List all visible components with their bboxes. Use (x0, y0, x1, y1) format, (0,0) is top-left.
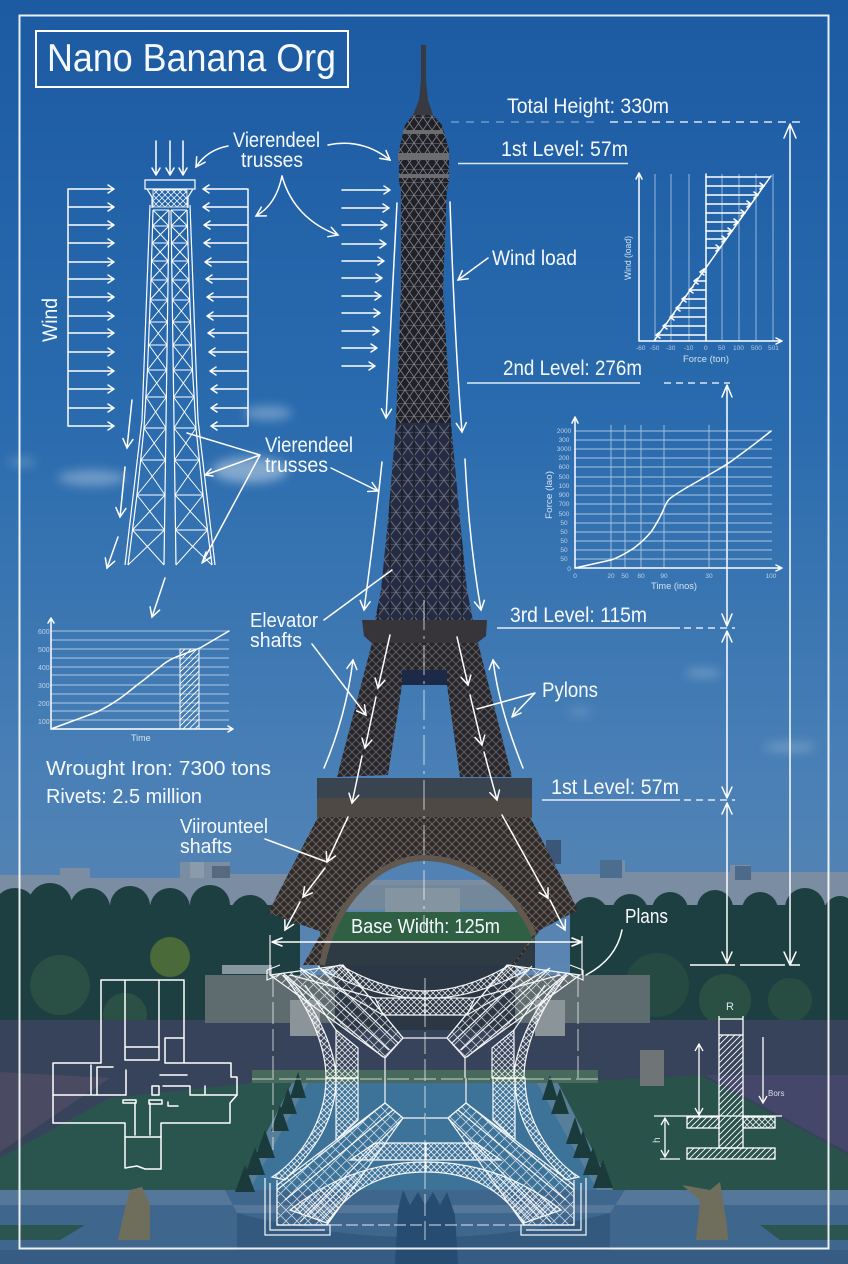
force chart grid (575, 425, 772, 568)
chart hatch (180, 649, 199, 729)
label: Vierendeel trusses mid: trusses (265, 454, 328, 477)
force chart y labels (557, 428, 777, 580)
statue left (118, 1187, 150, 1240)
force chart y labels: 100 (766, 573, 777, 580)
force chart y labels: 30 (705, 573, 713, 580)
top deck bands (398, 130, 449, 178)
force chart y label: Force (lao) (544, 471, 554, 519)
stats text: Wrought Iron: 7300 tons (46, 758, 271, 780)
city skyline (0, 840, 848, 905)
force chart y labels: 100 (559, 483, 570, 490)
label: Elevator shafts: Elevator (250, 610, 318, 632)
chart labels: 500 (38, 647, 50, 654)
chart grid (51, 631, 229, 720)
floor plan outline (53, 980, 237, 1169)
force chart y labels: 50 (621, 573, 629, 580)
wind chart tick labels: 0 (704, 345, 708, 352)
wind chart diagonal (654, 176, 771, 341)
chart curve (51, 631, 229, 729)
second platform (362, 620, 487, 646)
wind chart axes (636, 173, 782, 344)
wind arrows right of truss (203, 185, 248, 430)
title: Nano Banana Org (47, 37, 336, 80)
force chart y labels: 20 (607, 573, 615, 580)
arch band (322, 858, 534, 965)
wind chart small arrows (656, 183, 764, 338)
force chart y labels: 200 (559, 455, 570, 462)
force chart y labels: 50 (560, 520, 568, 527)
wind chart y label: Wind (load) (623, 236, 633, 280)
force chart y labels: 0 (573, 573, 577, 580)
wind chart tick labels: -50 (650, 345, 660, 352)
force chart y labels: 50 (560, 529, 568, 536)
chart labels: 400 (38, 665, 50, 672)
force chart y labels: 500 (559, 511, 570, 518)
tower top drum (399, 115, 449, 190)
wind arrows left (68, 185, 114, 430)
chart axes (48, 618, 233, 732)
label: wind: Wind (39, 298, 62, 342)
cross beam (402, 670, 447, 685)
lower arch structure (268, 817, 578, 965)
force chart y labels: 0 (567, 566, 571, 573)
dimension: total height: Total Height: 330m (507, 95, 669, 118)
force chart y labels: 500 (559, 474, 570, 481)
downward arrows left of truss (107, 400, 165, 617)
force chart y labels: 900 (559, 492, 570, 499)
wind load chart (623, 173, 782, 365)
chart labels: 100 (38, 719, 50, 726)
force chart y labels: 3000 (557, 446, 572, 453)
wind chart tick labels (636, 345, 779, 352)
tower spire (413, 45, 433, 115)
section flanges (687, 1117, 719, 1128)
label: Elevator shafts (250, 610, 318, 652)
label: Vierendeel trusses top: Vierendeel (233, 129, 320, 152)
wind chart tick labels: 50 (718, 345, 726, 352)
force chart y labels: 50 (560, 547, 568, 554)
middle shaft (375, 423, 473, 620)
label: Vierendeel trusses mid (265, 434, 353, 477)
force chart y labels: 700 (559, 501, 570, 508)
wind arrows near tower (342, 186, 390, 370)
center line (423, 600, 425, 930)
pointer: Plans (586, 930, 622, 975)
truss diagram (125, 180, 215, 565)
park ground (0, 965, 848, 1264)
mid legs (337, 643, 512, 777)
section dimensions (654, 1016, 782, 1159)
wind chart tick labels: -30 (666, 345, 676, 352)
label: Vierendeel trusses top (233, 129, 320, 172)
truss head lattice (153, 190, 187, 207)
fountain (395, 1190, 458, 1264)
pointer to tower (331, 468, 378, 491)
arrows from Vierendeel label (196, 143, 390, 235)
section labels: h (652, 1137, 663, 1143)
dimension: 3rd level: 3rd Level: 115m (510, 604, 647, 627)
section detail (652, 1001, 784, 1159)
dimension: total height (451, 95, 802, 965)
dimension: top 1st level: 1st Level: 57m (501, 138, 628, 161)
wind chart tick labels: 100 (733, 345, 744, 352)
force chart y labels: 50 (560, 556, 568, 563)
section column (719, 1035, 743, 1148)
wind chart x label: Force (ton) (683, 354, 729, 365)
chart labels: 600 (38, 629, 50, 636)
wind chart tick labels: -60 (636, 345, 646, 352)
pointers: Pylons (477, 693, 535, 717)
truss left column (125, 205, 169, 565)
plan top-left quadrant (267, 965, 425, 1078)
chart labels: 200 (38, 701, 50, 708)
label: Plans: Plans (625, 906, 668, 928)
plan bottom-left quadrant (265, 1078, 425, 1235)
chart labels (38, 629, 151, 743)
long load arrows by tower (324, 202, 523, 768)
section labels: R (726, 1001, 734, 1013)
wind chart tick labels: -10 (684, 345, 694, 352)
label: Viirounteel shafts: Viirounteel (180, 816, 268, 838)
pointers from trusses label (187, 433, 260, 563)
force chart x label: Time (inos) (651, 581, 697, 592)
stats text (46, 758, 271, 808)
dimension: base width (270, 916, 582, 975)
pointer: wind load (458, 258, 488, 280)
section labels: Bors (768, 1089, 784, 1098)
top down arrows (152, 141, 187, 175)
label: Pylons: Pylons (542, 679, 598, 702)
label: Viirounteel shafts: shafts (180, 836, 232, 858)
pointers: Elevator (312, 570, 392, 715)
force chart y labels: 300 (559, 437, 570, 444)
label: Elevator shafts: shafts (250, 630, 302, 652)
first platform (317, 778, 532, 800)
level dimension arrows (722, 385, 732, 963)
hedge cones (235, 1072, 613, 1192)
truss cap (145, 180, 195, 208)
label: Viirounteel shafts (180, 816, 268, 858)
stats text: Rivets: 2.5 million (46, 786, 202, 808)
pointer: Viirounteel (265, 839, 327, 862)
chart labels: 300 (38, 683, 50, 690)
force chart y labels: 50 (560, 538, 568, 545)
statue right (682, 1182, 728, 1240)
truss right column (171, 205, 215, 565)
bottom-left chart (38, 618, 233, 743)
wind chart tick labels: 501 (768, 345, 779, 352)
force chart y labels: 90 (660, 573, 668, 580)
force chart y labels: 600 (559, 464, 570, 471)
label: Vierendeel trusses top: trusses (241, 149, 303, 172)
force chart axes (572, 417, 782, 571)
dimension: lower 1st level: 1st Level: 57m (551, 776, 679, 799)
Eiffel tower photo (268, 45, 578, 965)
clouds (8, 406, 816, 752)
trees (0, 883, 848, 1037)
dimension: 2nd level: 2nd Level: 276m (503, 357, 642, 380)
plan bottom-right quadrant (426, 1078, 586, 1235)
section labels (652, 1001, 784, 1143)
dimension: base width: Base Width: 125m (351, 916, 500, 938)
chart labels: Time (131, 733, 151, 743)
label: Vierendeel trusses mid: Vierendeel (265, 434, 353, 457)
force chart curve (575, 431, 771, 568)
force-time chart (544, 417, 782, 592)
tower plan view (252, 965, 598, 1240)
arch background view (320, 885, 535, 970)
wind chart verticals (655, 174, 773, 341)
floor plan (53, 980, 237, 1169)
upper shaft (396, 185, 451, 423)
load arrows inside legs (285, 635, 565, 930)
plan axes (252, 975, 598, 1240)
wind chart rows (658, 177, 770, 335)
wind chart tick labels: 500 (751, 345, 762, 352)
plan top-right quadrant (425, 965, 583, 1078)
force chart y labels: 80 (637, 573, 645, 580)
label: wind load: Wind load (492, 247, 577, 270)
floor plan interior (53, 980, 237, 1137)
force chart y labels: 2000 (557, 428, 572, 435)
